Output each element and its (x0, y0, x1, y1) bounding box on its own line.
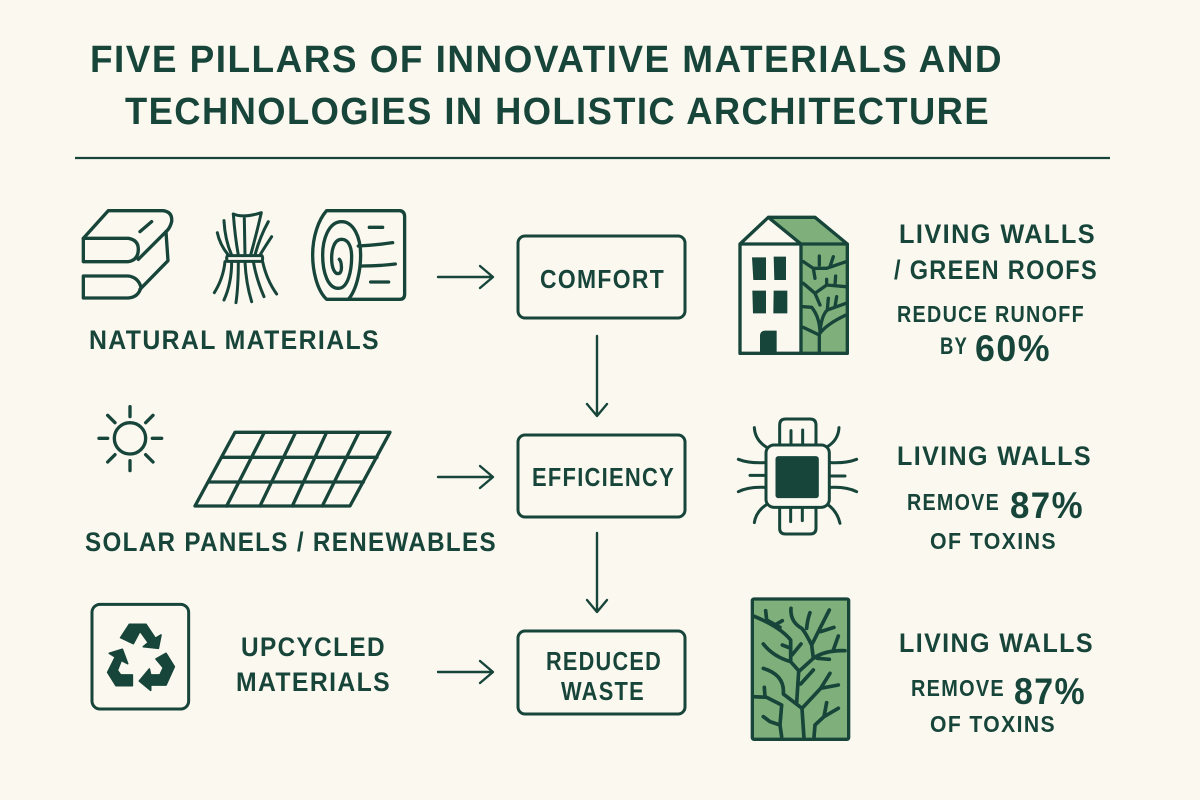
box: efficiency (518, 435, 685, 517)
title (90, 39, 1003, 133)
stat: living walls toxins one: REMOVE (907, 489, 1000, 515)
label: solar panels: SOLAR PANELS / RENEWABLES (85, 527, 497, 557)
icon: recycling symbol (92, 604, 189, 709)
stat: living walls and green roofs: / GREEN ROOFS (894, 255, 1098, 285)
arrow: comfort to efficiency (587, 336, 607, 416)
stat: living walls and green roofs: 60% (975, 328, 1051, 369)
box: reduced waste: WASTE (561, 676, 645, 706)
box: reduced waste (518, 631, 685, 714)
icon: straw bundle (214, 213, 277, 303)
stat: living walls toxins one: OF TOXINS (930, 528, 1057, 554)
box: comfort: COMFORT (540, 264, 665, 294)
stat: living walls toxins one (897, 441, 1092, 554)
arrow: solar to efficiency (438, 466, 493, 488)
stat: living walls and green roofs: BY (940, 333, 968, 360)
stat: living walls toxins two: REMOVE (911, 675, 1005, 701)
panel: solar panels (85, 407, 497, 557)
icon: living wall panel (752, 599, 849, 739)
label: upcycled materials (236, 632, 391, 697)
stat: living walls toxins two: OF TOXINS (930, 711, 1056, 737)
panel: upcycled materials (92, 604, 391, 709)
stat: living walls and green roofs: LIVING WALLS (899, 219, 1096, 249)
title: FIVE PILLARS OF INNOVATIVE MATERIALS AND (90, 39, 1003, 81)
arrow: natural materials to comfort (438, 266, 493, 288)
label: upcycled materials: UPCYCLED (241, 632, 386, 662)
stat: living walls toxins two: LIVING WALLS (899, 628, 1094, 658)
panel: natural materials (83, 211, 405, 355)
stat: living walls toxins one: LIVING WALLS (897, 441, 1092, 471)
stat: living walls toxins two (899, 628, 1094, 737)
icon: rolled insulation (313, 211, 405, 299)
icon: sun (99, 407, 162, 471)
label: upcycled materials: MATERIALS (236, 667, 391, 697)
box: efficiency: EFFICIENCY (532, 462, 675, 492)
icon: building with green wall (740, 217, 847, 353)
icon: microchip (738, 419, 857, 534)
stat: living walls and green roofs (894, 219, 1098, 369)
icon: stacked bricks (83, 211, 172, 298)
box: comfort (518, 236, 685, 318)
icon: solar panel grid (195, 432, 390, 506)
arrow: upcycled to reduced waste (438, 661, 493, 683)
stat: living walls and green roofs: REDUCE RUNOFF (897, 301, 1085, 327)
arrow: efficiency to reduced waste (587, 533, 607, 612)
stat: living walls toxins one: 87% (1010, 485, 1084, 526)
stat: living walls toxins two: 87% (1014, 671, 1086, 712)
box: reduced waste: REDUCED (546, 646, 662, 676)
label: natural materials: NATURAL MATERIALS (89, 325, 380, 355)
title: TECHNOLOGIES IN HOLISTIC ARCHITECTURE (125, 91, 990, 133)
